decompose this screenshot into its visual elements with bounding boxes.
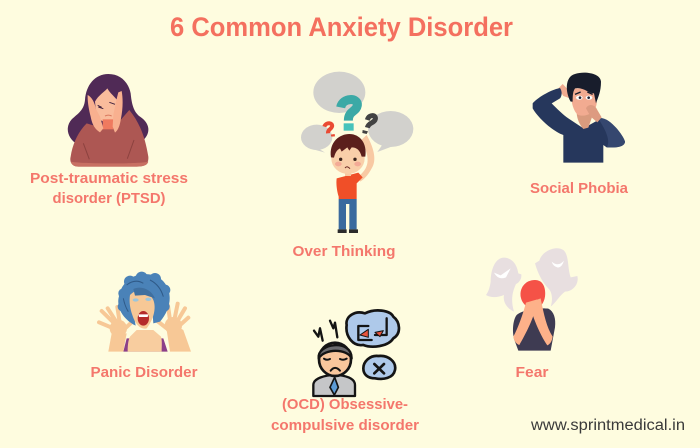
icon: screaming woman with raised hands	[99, 272, 191, 352]
label: OCD: compulsive disorder	[271, 417, 419, 434]
label: PTSD: disorder (PTSD)	[52, 190, 166, 207]
icon: worried man with repeating thought bubbles	[313, 310, 399, 396]
label: OCD	[271, 396, 419, 434]
label: Social Phobia: Social Phobia	[530, 180, 629, 197]
label: PTSD: Post-traumatic stress	[30, 170, 188, 187]
label: Over Thinking: Over Thinking	[292, 243, 396, 260]
label: Panic Disorder: Panic Disorder	[90, 364, 198, 381]
icon: distressed woman holding her face	[68, 74, 148, 167]
label: OCD: (OCD) Obsessive-	[282, 396, 408, 413]
label: Fear: Fear	[516, 364, 549, 381]
icon: boy with question marks and speech bubbles	[301, 72, 413, 233]
icon: frightened person covering face with ghosts	[486, 248, 578, 351]
title: 6 Common Anxiety Disorder	[170, 12, 513, 42]
label: PTSD	[30, 170, 188, 207]
icon: anxious man scratching his head	[533, 73, 625, 163]
website credit: www.sprintmedical.in	[530, 417, 685, 434]
